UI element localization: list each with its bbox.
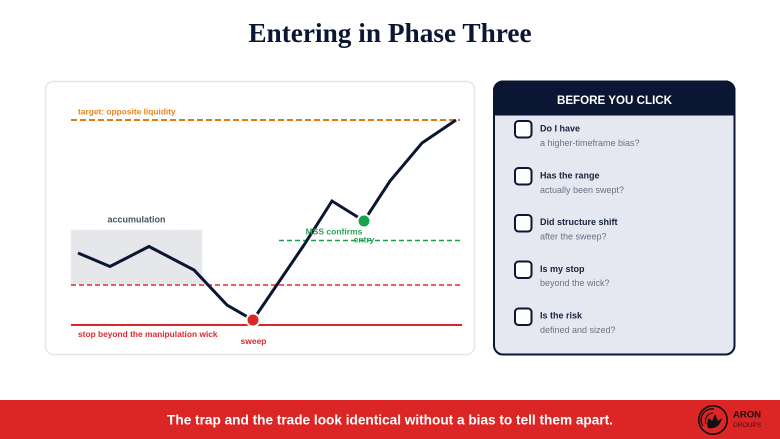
- label: stop: stop beyond the manipulation wick: [78, 329, 218, 339]
- checklist header: [494, 82, 734, 114]
- item 2: Has the range: [540, 170, 600, 180]
- item 1: Do I have: [540, 124, 580, 134]
- price path: [78, 120, 456, 320]
- item 5: [515, 308, 616, 335]
- panel: checklist: [494, 82, 734, 354]
- stop line: [71, 324, 462, 326]
- MSS dashed line: [279, 240, 462, 242]
- logo: Aron Groups: [699, 406, 762, 434]
- label: sweep: sweep: [240, 336, 266, 346]
- logo: Aron Groups: GROUPS: [733, 422, 762, 429]
- entry marker: [358, 214, 370, 228]
- range low dashed line: [71, 284, 460, 286]
- panel: price chart: [46, 82, 474, 354]
- item 3: after the sweep?: [540, 232, 607, 242]
- item 3: [515, 215, 618, 242]
- footer message: The trap and the trade look identical without a bias to tell them apart.: [167, 412, 613, 428]
- footer banner: [0, 400, 780, 439]
- item 2: actually been swept?: [540, 185, 624, 195]
- item 4: [515, 262, 610, 288]
- label: accumulation: accumulation: [107, 214, 166, 224]
- sweep marker: [246, 314, 260, 326]
- accumulation range box: [71, 230, 202, 284]
- logo: Aron Groups: ARON: [733, 410, 761, 420]
- label: target: target: opposite liquidity: [78, 106, 176, 116]
- item 1: a higher-timeframe bias?: [540, 138, 640, 148]
- title: Entering in Phase Three: [248, 18, 532, 48]
- item 2: [515, 168, 624, 195]
- item 1: [515, 121, 640, 148]
- label: MSS confirms: MSS confirms: [306, 226, 363, 236]
- item 4: Is my stop: [540, 264, 585, 274]
- item 5: Is the risk: [540, 310, 583, 320]
- item 5: defined and sized?: [540, 325, 616, 335]
- checklist header: BEFORE YOU CLICK: [557, 94, 673, 107]
- item 3: Did structure shift: [540, 217, 618, 227]
- target line: [71, 119, 460, 121]
- item 4: beyond the wick?: [540, 278, 610, 288]
- label: entry: entry: [354, 234, 375, 244]
